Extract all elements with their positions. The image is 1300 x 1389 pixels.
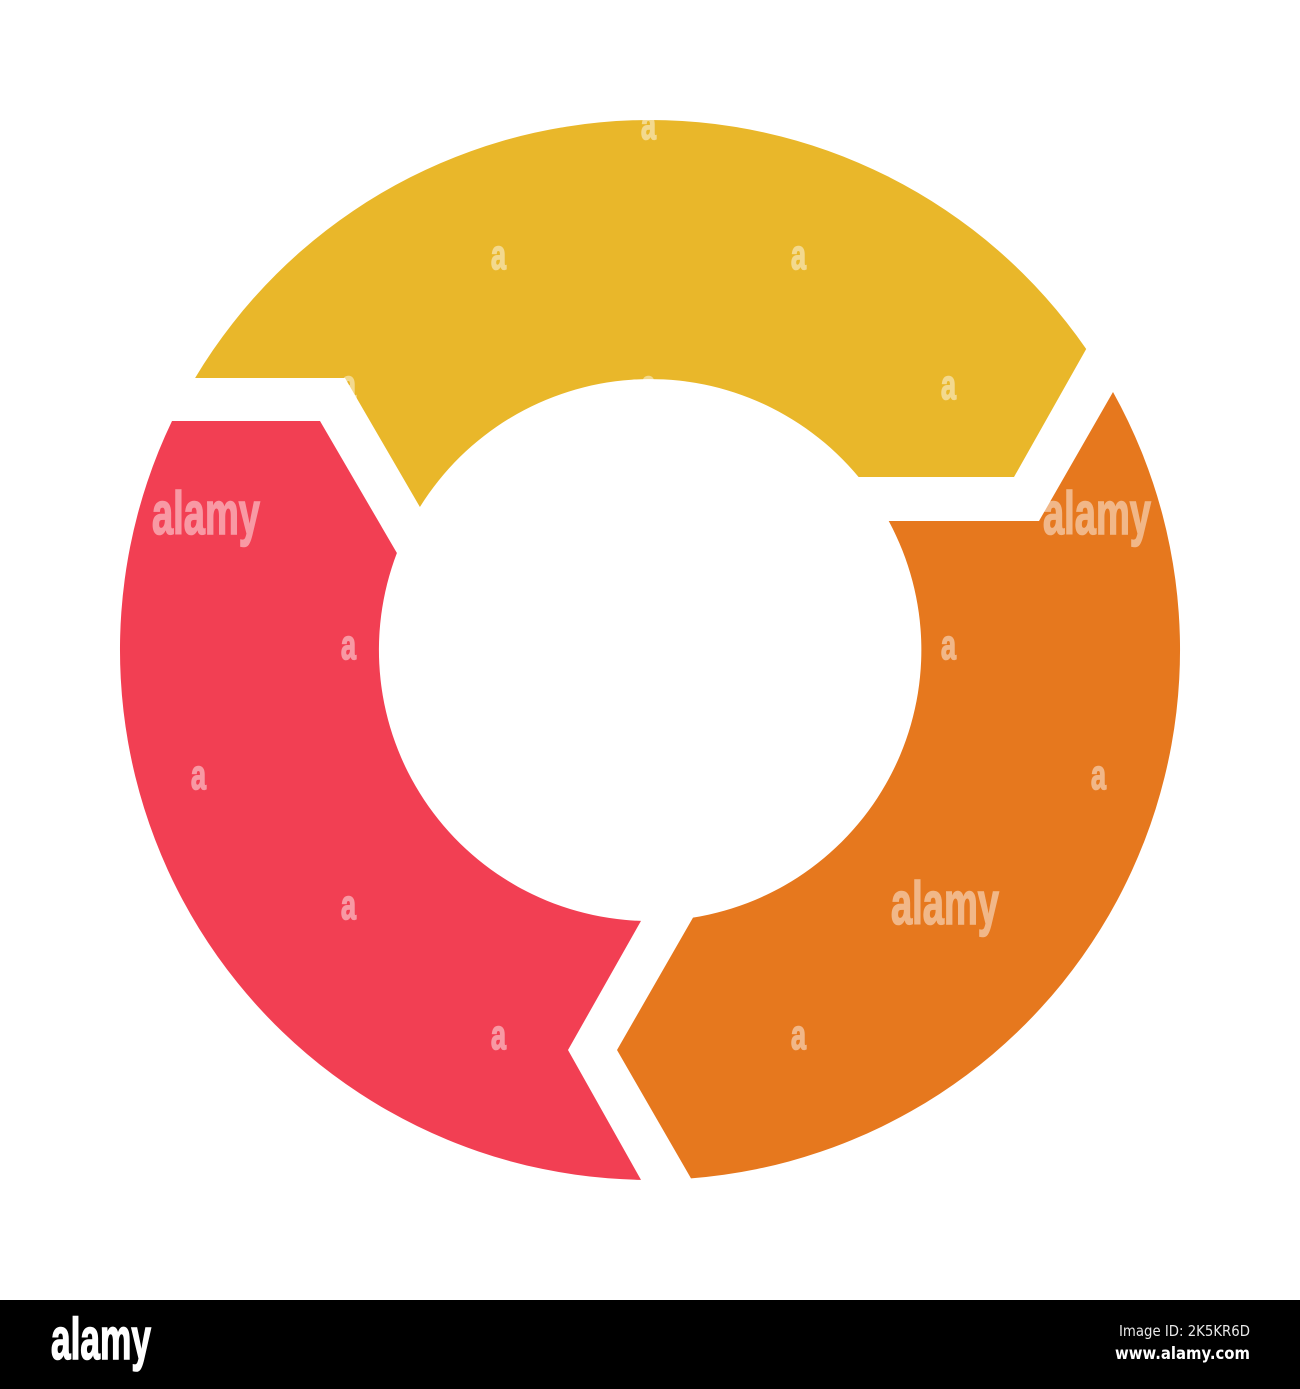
watermark: small letters: a <box>491 1011 506 1058</box>
watermark: small letters <box>191 101 1106 1058</box>
watermark: small letters: a <box>341 361 356 408</box>
watermark: small letters: a <box>341 621 356 668</box>
watermark: large wordmarks: alamy <box>891 870 999 937</box>
watermark: small letters: a <box>791 1011 806 1058</box>
watermark: small letters: a <box>641 101 656 148</box>
watermark: small letters: a <box>491 231 506 278</box>
watermark: small letters: a <box>641 361 656 408</box>
segment: orange arrow <box>617 392 1180 1178</box>
segment: yellow arrow <box>195 120 1086 507</box>
watermark: small letters: a <box>191 751 206 798</box>
segment: red arrow <box>120 421 641 1180</box>
watermark: large wordmarks <box>152 480 1151 937</box>
watermark: small letters: a <box>341 881 356 928</box>
watermark: small letters: a <box>941 361 956 408</box>
watermark: large wordmarks: alamy <box>1043 480 1151 547</box>
watermark: large wordmarks: alamy <box>152 480 260 547</box>
cycle diagram <box>120 120 1180 1180</box>
footer bar <box>0 1300 1300 1389</box>
watermark: small letters: a <box>941 621 956 668</box>
watermark: small letters: a <box>791 231 806 278</box>
watermark overlay <box>152 101 1151 1058</box>
footer logo: alamy <box>51 1307 151 1372</box>
footer image id: Image ID: 2K5KR6D <box>1119 1322 1250 1340</box>
footer url: www.alamy.com <box>1115 1344 1250 1364</box>
watermark: small letters: a <box>1091 751 1106 798</box>
